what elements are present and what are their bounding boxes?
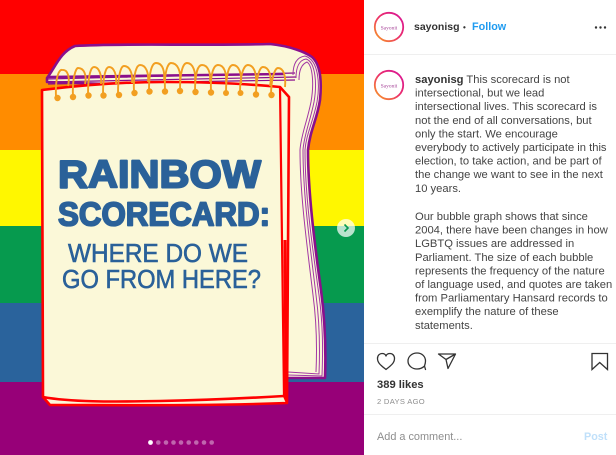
caption text: only the start. We encourage [415,128,558,140]
caption text: 2004, there have been changes in how [415,225,609,237]
caption text: from Parliamentary Hansard records to [415,293,608,305]
caption text: intersectional lives. This scorecard is [415,101,597,113]
icon: comment [408,353,426,370]
caption text: statements. [415,320,473,332]
icon: bookmark [592,354,608,370]
header avatar: Sayonii [381,26,398,32]
caption text: not the end of all conversations, but [415,115,593,127]
notebook illustration [42,44,325,405]
header username and follow: • [463,23,466,32]
header avatar [375,13,403,41]
header username and follow [414,21,507,33]
caption avatar [375,71,403,99]
icon: heart [378,354,394,370]
caption text: intersectional, but we lead [415,88,544,100]
title [58,154,270,294]
caption text: Our bubble graph shows that since [415,211,588,223]
caption text: election, to take action, and be part of [415,156,602,168]
panel: rainbow image [0,0,364,455]
more menu [595,26,606,29]
comment input placeholder: Add a comment... [377,431,462,443]
timestamp: 2 DAYS AGO [377,397,425,406]
next arrow button [337,219,355,237]
caption text: of language used, and quotes are taken [415,279,612,291]
post button: Post [584,431,608,443]
title: SCORECARD: [58,196,270,232]
carousel dots [148,440,214,445]
caption text: 10 years. [415,183,461,195]
caption text: sayonisg This scorecard is not [415,74,571,86]
caption text [415,74,612,332]
caption avatar: Sayonii [381,84,398,90]
title: RAINBOW [58,154,261,196]
caption text: LGBTQ issues are addressed in [415,238,574,250]
front page [42,82,289,405]
caption text: exemplify the nature of these [415,306,559,318]
likes count: 389 likes [377,379,424,391]
caption text: represents the frequency of the nature [415,265,605,277]
header username and follow: sayonisg [414,21,460,33]
icon: share [438,354,456,368]
caption text: Parliament. The size of each bubble [415,252,593,264]
title: WHERE DO WE [68,238,248,268]
caption text: everybody to actively participate in this [415,142,607,154]
back page [47,44,325,378]
spiral rings [54,63,285,101]
title: GO FROM HERE? [62,264,261,294]
header username and follow: Follow [472,21,507,33]
caption text: the change we want to see in the next [415,169,604,181]
